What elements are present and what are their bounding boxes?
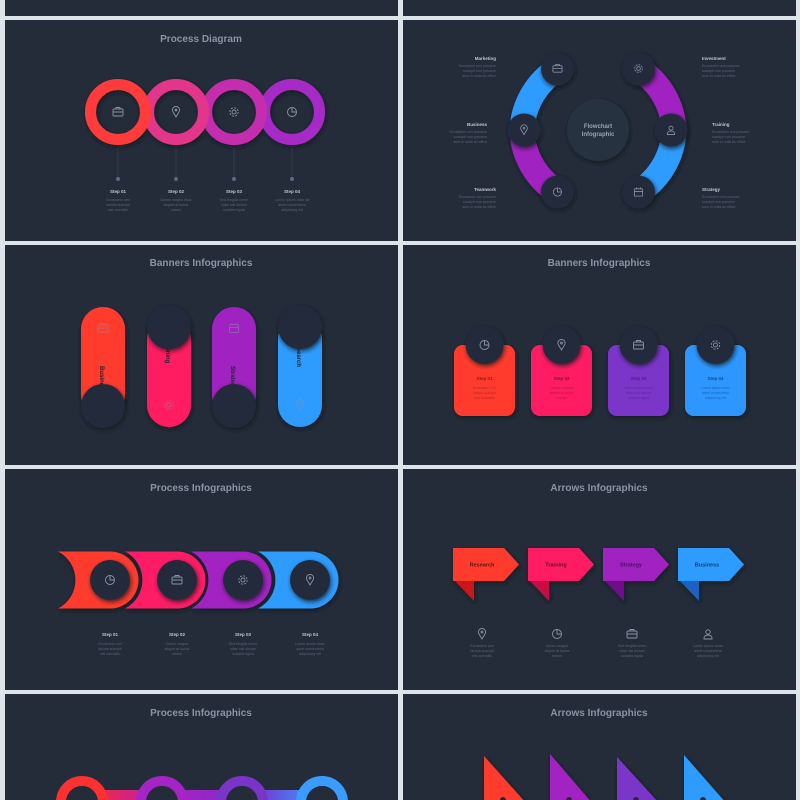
flag dots xyxy=(500,797,706,800)
side labels: Business xyxy=(467,122,487,127)
card icons xyxy=(480,339,720,350)
panel: bottom arrows infographics xyxy=(403,694,796,800)
step labels: aliquet at luctus xyxy=(164,203,189,207)
side labels: Ecosistem umi posuere xyxy=(702,195,739,199)
panel: bottom process infographics xyxy=(5,694,398,800)
step labels: Donec magna risus xyxy=(161,198,192,202)
step labels: Lorem ipsum dolor sit xyxy=(275,198,309,202)
arrow descriptions: sodales ligula xyxy=(621,654,643,658)
side labels: sum in nulla ac effice xyxy=(462,74,496,78)
card texts: aliquet at luctus xyxy=(549,391,574,395)
icons: process diagram xyxy=(113,106,296,117)
card texts: Step 01 xyxy=(476,376,493,381)
card texts: amet consectetur xyxy=(702,391,730,395)
pill circles xyxy=(81,305,322,428)
step texts: vitae nisl dictum xyxy=(230,647,256,651)
pill texts: Research xyxy=(295,340,301,367)
side labels: Strategy xyxy=(702,187,721,192)
card texts: rutrum xyxy=(556,396,567,400)
step labels: lacinia suscipit xyxy=(106,203,130,207)
step texts: Donec magna xyxy=(166,642,188,646)
panel: arrows infographics xyxy=(403,469,796,690)
step labels: Ecosistem umi xyxy=(106,198,130,202)
card texts: Sed fringilla lorem xyxy=(624,386,653,390)
panel: process infographics xyxy=(5,469,398,690)
step labels: Step 01 xyxy=(110,189,126,194)
step connectors xyxy=(116,148,294,181)
arrow labels xyxy=(470,562,719,568)
side labels: suscipit non posuere xyxy=(702,200,735,204)
center circle: Flowchart xyxy=(584,124,612,130)
card texts: sodales ligula xyxy=(628,396,649,400)
step labels: sodales ligula xyxy=(223,208,245,212)
panel: process diagram xyxy=(5,20,398,241)
step labels: adipiscing elit xyxy=(281,208,303,212)
panel: top-right partial xyxy=(403,0,796,16)
step labels: Step 03 xyxy=(226,189,242,194)
arrow descriptions: Lorem ipsum dolor xyxy=(693,644,724,648)
arrow descriptions: lacinia suscipit xyxy=(470,649,494,653)
step texts: Step 01 xyxy=(102,632,118,637)
arrow icons xyxy=(478,628,712,639)
side labels xyxy=(450,56,749,209)
step texts: Lorem ipsum dolor xyxy=(295,642,326,646)
step texts: Ecosistem umi xyxy=(98,642,122,646)
arrow descriptions: vitae nisl dictum xyxy=(619,649,645,653)
side labels: Investment xyxy=(702,56,726,61)
title: banners cards: Banners Infographics xyxy=(548,258,651,269)
side labels: Teamwork xyxy=(474,187,496,192)
step labels: nisi convallis xyxy=(108,208,128,212)
cards xyxy=(454,345,746,416)
nodes xyxy=(508,52,688,208)
step labels: rutrum xyxy=(171,208,181,212)
step labels: Step 02 xyxy=(168,189,184,194)
step texts xyxy=(98,632,326,656)
panel: flowchart xyxy=(403,20,796,241)
inner circles xyxy=(90,560,330,600)
arrow labels: Research xyxy=(470,562,495,568)
card texts: adipiscing elit xyxy=(705,396,726,400)
flag shapes xyxy=(484,754,726,800)
side labels: suscipit non posuere xyxy=(463,69,496,73)
step labels: amet consectetur xyxy=(278,203,307,207)
step labels: Step 04 xyxy=(284,189,300,194)
side labels: sum in nulla ac effice xyxy=(702,205,736,209)
side labels: suscipit non posuere xyxy=(712,135,745,139)
arrow descriptions: amet consectetur xyxy=(694,649,723,653)
card texts: vitae nisl dictum xyxy=(626,391,651,395)
side labels: sum in nulla ac effice xyxy=(702,74,736,78)
arrow descriptions: nisi convallis xyxy=(472,654,492,658)
panel: top-left partial xyxy=(5,0,398,16)
side labels: Training xyxy=(712,122,730,127)
card texts: Lorem ipsum dolor xyxy=(701,386,731,390)
step labels: Sed fringilla lorem xyxy=(220,198,248,202)
step texts: Step 02 xyxy=(169,632,185,637)
side labels: suscipit non posuere xyxy=(454,135,487,139)
side labels: Ecosistem umi posuere xyxy=(702,64,739,68)
card texts: Step 03 xyxy=(630,376,647,381)
arrow descriptions: Ecosistem umi xyxy=(470,644,494,648)
arrow descriptions xyxy=(470,644,724,658)
pill texts xyxy=(98,340,301,393)
center circle xyxy=(567,99,629,161)
arrow labels: Strategy xyxy=(620,562,643,568)
card texts: Ecosistem umi xyxy=(473,386,496,390)
arrow descriptions: adipiscing elit xyxy=(697,654,719,658)
card texts: Step 04 xyxy=(707,376,724,381)
step labels xyxy=(106,189,309,212)
arrow descriptions: Sed fringilla lorem xyxy=(618,644,646,648)
step texts: nisi convallis xyxy=(100,652,120,656)
step texts: aliquet at luctus xyxy=(165,647,190,651)
title: bottom process: Process Infographics xyxy=(150,708,252,719)
card texts xyxy=(473,376,731,400)
step texts: lacinia suscipit xyxy=(98,647,122,651)
side labels: sum in nulla ac effice xyxy=(454,140,487,144)
arcs xyxy=(522,69,674,192)
center circle: Infographic xyxy=(582,132,615,138)
arrows xyxy=(453,548,744,601)
step texts: Step 04 xyxy=(302,632,318,637)
rings chain xyxy=(90,84,320,140)
step texts: sodales ligula xyxy=(232,652,254,656)
side labels: Marketing xyxy=(475,56,496,61)
card circles xyxy=(466,326,734,364)
panel: banners cards xyxy=(403,245,796,465)
arrow labels: Business xyxy=(695,562,719,568)
card texts: Donec magna xyxy=(550,386,573,390)
step texts: Sed fringilla lorem xyxy=(229,642,257,646)
arrow descriptions: aliquet at luctus xyxy=(545,649,570,653)
inner icons xyxy=(106,574,314,585)
title: process infographics: Process Infographics xyxy=(150,483,252,494)
side labels: Ecosistem umi posuere xyxy=(450,130,487,134)
step texts: Step 03 xyxy=(235,632,251,637)
pill texts: Business xyxy=(98,366,104,393)
connected rings xyxy=(61,781,343,800)
card texts: Step 02 xyxy=(553,376,570,381)
title: banners: Banners Infographics xyxy=(150,258,253,269)
card texts: nisi convallis xyxy=(474,396,495,400)
pill texts: Strategy xyxy=(229,366,235,391)
side labels: suscipit non posuere xyxy=(702,69,735,73)
title: process diagram: Process Diagram xyxy=(160,34,242,45)
side labels: Ecosistem umi posuere xyxy=(459,64,496,68)
arrow descriptions: rutrum xyxy=(552,654,562,658)
step labels: vitae nisl dictum xyxy=(221,203,247,207)
pill icons xyxy=(98,323,304,410)
step texts: rutrum xyxy=(172,652,182,656)
title: arrows: Arrows Infographics xyxy=(550,483,648,494)
node icons xyxy=(521,64,675,196)
step texts: adipiscing elit xyxy=(299,652,321,656)
arrow labels: Training xyxy=(545,562,567,568)
side labels: Ecosistem umi posuere xyxy=(459,195,496,199)
pills xyxy=(81,307,322,427)
D shapes xyxy=(58,552,338,608)
pill texts: Training xyxy=(164,340,170,364)
arrow descriptions: Donec magna xyxy=(546,644,568,648)
side labels: Ecosistem umi posuere xyxy=(712,130,749,134)
card texts: lacinia suscipit xyxy=(473,391,496,395)
side labels: suscipit non posuere xyxy=(463,200,496,204)
step texts: amet consectetur xyxy=(296,647,325,651)
side labels: sum in nulla ac effice xyxy=(462,205,496,209)
panel: banners pills xyxy=(5,245,398,465)
side labels: sum in nulla ac effice xyxy=(712,140,746,144)
title: bottom arrows: Arrows Infographics xyxy=(550,708,648,719)
